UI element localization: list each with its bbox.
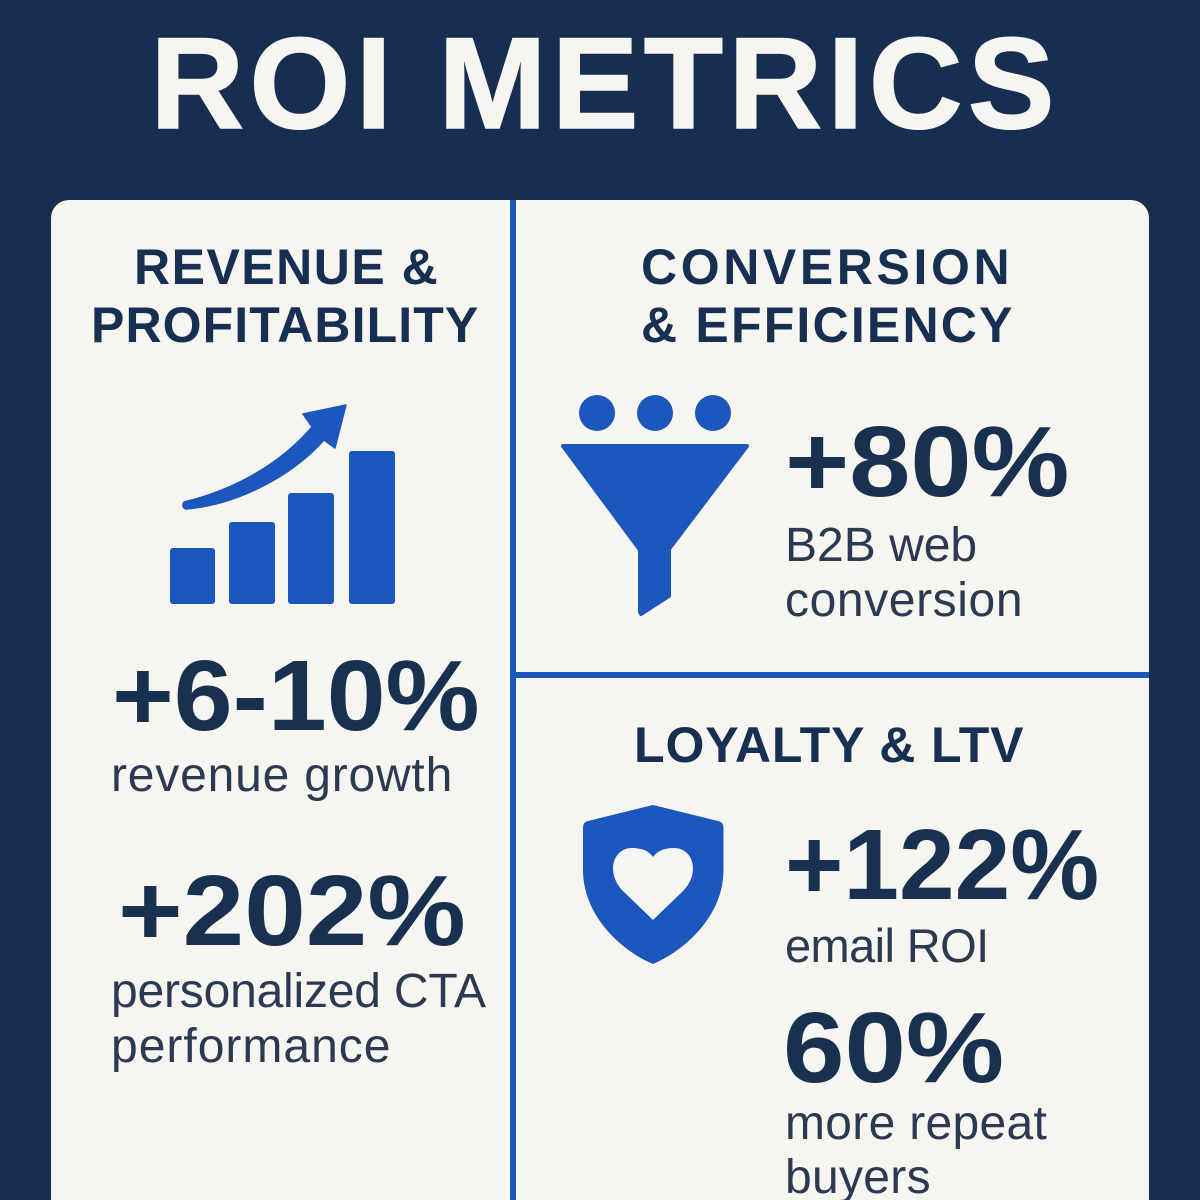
heading: conversion and efficiency [641,239,1015,353]
label: CTA: personalized CTA [111,965,486,1018]
heading: conversion and efficiency: CONVERSION [641,239,1013,295]
icon: growth bars with arrow [170,404,395,604]
stat: conversion: +80% [785,406,1069,518]
title: ROI METRICS [150,10,1060,156]
label: CTA [111,965,486,1073]
stat: CTA: +202% [118,855,466,967]
label: email: email ROI [785,919,989,972]
label: conversion [785,519,1023,627]
icon: funnel [560,395,749,616]
label: conversion: conversion [785,574,1023,627]
panel divider horizontal [516,672,1149,678]
heading: revenue and profitability: REVENUE & [134,239,439,295]
panel divider vertical [510,200,516,1200]
panel: main card [51,200,1149,1200]
stat: repeat buyers: 60% [783,992,1004,1104]
heading: conversion and efficiency: & EFFICIENCY [641,297,1015,353]
stat: email: +122% [785,809,1099,921]
heading: revenue and profitability [91,239,479,353]
heading: loyalty: LOYALTY & LTV [634,717,1024,773]
label: revenue growth: revenue growth [111,749,453,802]
heading: revenue and profitability: PROFITABILITY [91,297,479,353]
label: repeat buyers [785,1097,1047,1200]
stat: revenue growth: +6-10% [112,640,480,752]
label: repeat buyers: more repeat [785,1097,1047,1150]
icon: shield heart [583,805,724,964]
label: conversion: B2B web [785,519,977,572]
label: CTA: performance [111,1020,391,1073]
